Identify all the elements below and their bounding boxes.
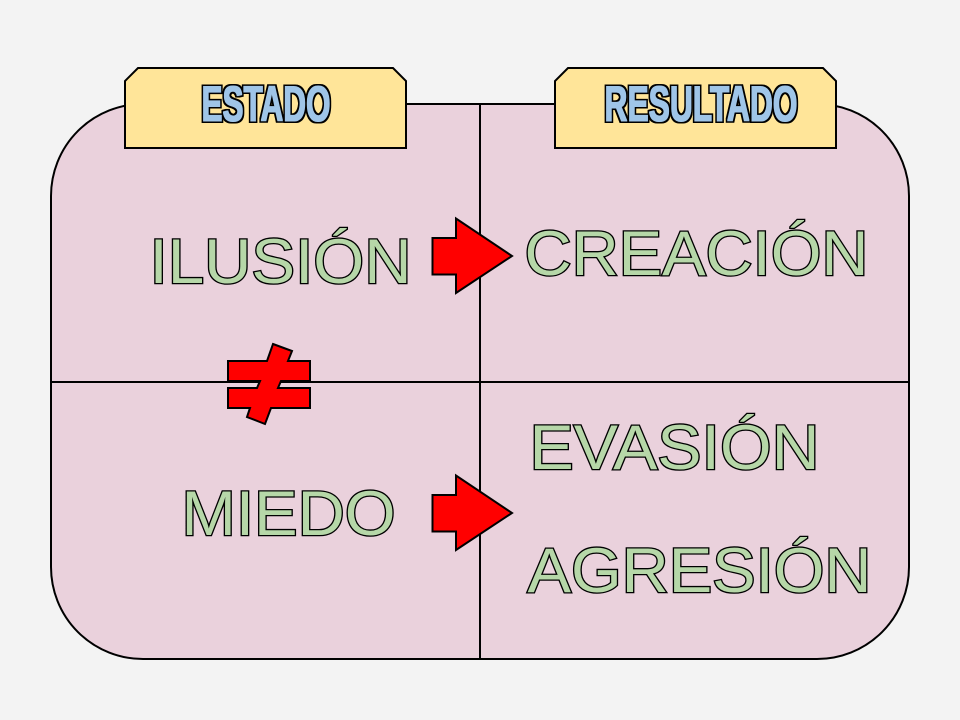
tab: RESULTADO: RESULTADO <box>604 76 798 132</box>
tab: ESTADO <box>125 68 406 148</box>
text: EVASIÓN: EVASIÓN <box>530 413 820 483</box>
text: ILUSIÓN: ILUSIÓN <box>150 227 412 297</box>
text: AGRESIÓN: AGRESIÓN <box>528 536 872 606</box>
text: CREACIÓN: CREACIÓN <box>524 219 868 289</box>
panel: rounded quadrant background <box>51 104 909 659</box>
horizontal axis <box>51 381 909 383</box>
icon: not-equal sign <box>228 344 310 424</box>
vertical axis <box>479 104 481 659</box>
arrow: MIEDO to EVASIÓN and AGRESIÓN <box>432 476 512 550</box>
tab: ESTADO: ESTADO <box>202 76 330 132</box>
text: MIEDO: MIEDO <box>182 479 396 549</box>
tab: RESULTADO <box>555 68 836 148</box>
arrow: ILUSIÓN to CREACIÓN <box>432 218 512 293</box>
